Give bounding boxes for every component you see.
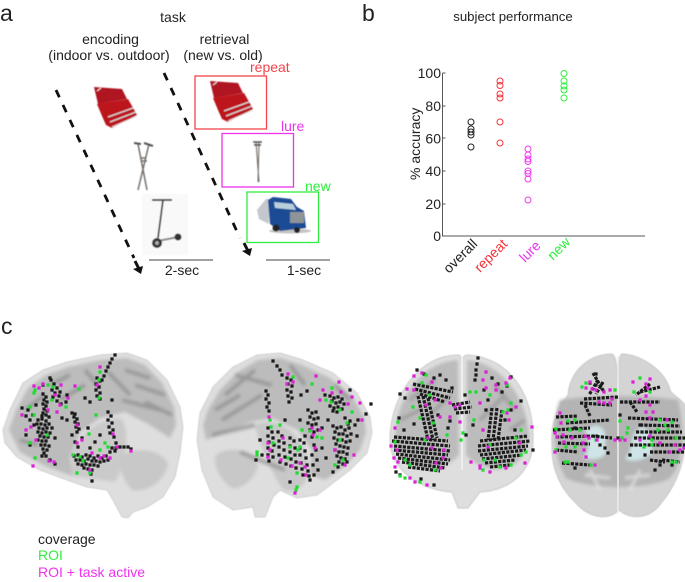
image: truck	[257, 197, 311, 234]
points: new	[561, 70, 567, 101]
x axis labels: overall	[440, 236, 480, 276]
image: toolbox retrieval	[210, 81, 253, 122]
points: repeat	[497, 78, 503, 146]
brain: posterior view	[390, 355, 533, 508]
ROI electrodes	[30, 372, 108, 473]
label: new: new	[305, 178, 332, 194]
arrow: encoding timeline	[56, 90, 143, 274]
panel a: task	[48, 9, 332, 278]
y axis tick labels: 20	[425, 196, 441, 212]
heading: encoding: (indoor vs. outdoor)	[48, 47, 170, 63]
y axis tick labels: 0	[433, 228, 441, 244]
x axis labels: new	[544, 233, 574, 263]
heading: retrieval: (new vs. old)	[183, 47, 263, 63]
timescale: 1-sec: 1-sec	[287, 262, 321, 278]
panel c: electrode coverage	[3, 353, 685, 580]
panel label c: c	[1, 313, 12, 339]
brain surface	[197, 353, 372, 517]
brain surface	[390, 355, 533, 508]
ROI and task active electrodes	[22, 367, 131, 470]
x axis labels	[440, 233, 574, 276]
brain surface	[3, 353, 183, 518]
image: crutches retrieval	[253, 142, 262, 182]
box: lure	[222, 134, 294, 187]
coverage electrodes	[553, 373, 685, 465]
legend	[38, 531, 145, 580]
y axis title: % accuracy	[407, 108, 423, 180]
x axis labels: repeat	[471, 236, 510, 275]
label: lure: lure	[281, 118, 305, 134]
heading: subject performance: subject performance	[453, 9, 573, 24]
image: toolbox encoding	[94, 87, 137, 128]
heading: retrieval: retrieval	[200, 31, 249, 47]
coverage electrodes	[392, 384, 530, 471]
legend: ROI: ROI	[38, 547, 63, 563]
brain: dorsal view	[552, 354, 685, 517]
y axis tick labels: 60	[425, 130, 441, 146]
ROI and task active electrodes	[391, 372, 532, 485]
legend: coverage: coverage	[38, 531, 96, 547]
panel b: subject performance	[407, 9, 645, 276]
image: scooter	[142, 194, 188, 255]
ROI electrodes	[395, 375, 526, 482]
brain: right lateral view	[197, 353, 372, 517]
box: new	[247, 192, 318, 242]
y axis tick labels: 40	[425, 163, 441, 179]
ROI and task active electrodes	[555, 379, 684, 465]
chart: accuracy scatter	[407, 65, 645, 276]
ROI and task active electrodes	[268, 374, 362, 493]
panel label b: b	[362, 0, 375, 26]
timescale: 1-sec	[266, 260, 330, 278]
panel label a: a	[0, 0, 13, 26]
ROI electrodes	[556, 378, 676, 465]
ROI electrodes	[257, 377, 352, 490]
y axis tick labels	[418, 65, 441, 244]
image: crutches encoding	[134, 143, 153, 190]
label: repeat: repeat	[250, 59, 290, 75]
coverage electrodes	[22, 355, 131, 481]
timescale: 2-sec	[149, 260, 213, 278]
points: overall	[468, 119, 474, 150]
coverage electrodes	[256, 361, 371, 482]
heading: encoding: encoding	[82, 31, 139, 47]
arrow: retrieval timeline	[164, 73, 252, 256]
heading: task: task	[160, 9, 187, 25]
y axis tick labels: 100	[418, 65, 441, 81]
y axis tick labels: 80	[425, 98, 441, 114]
timescale: 2-sec: 2-sec	[165, 262, 199, 278]
points: lure	[525, 146, 531, 203]
x axis labels: lure	[516, 237, 544, 265]
brain surface	[552, 354, 685, 517]
legend: ROI + task active: ROI + task active	[38, 564, 145, 580]
brain: left lateral view	[3, 353, 183, 518]
box: repeat	[195, 76, 266, 129]
axes	[442, 73, 645, 236]
